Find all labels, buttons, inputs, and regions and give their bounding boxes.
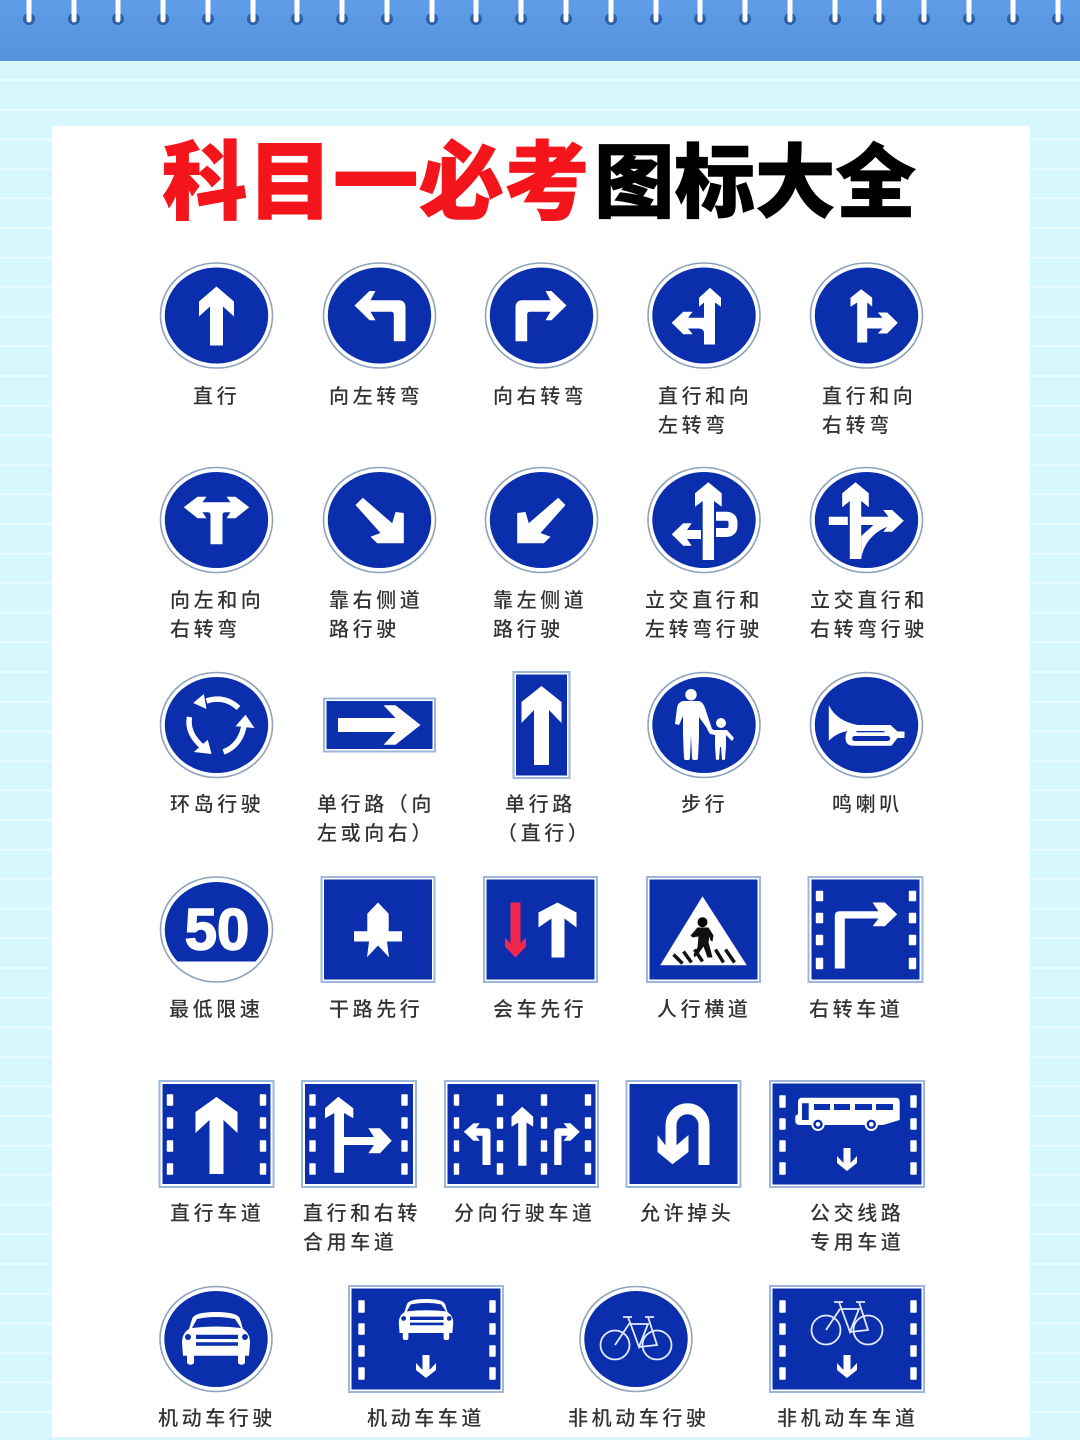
sign: 立交直行和左转弯行驶 (648, 468, 760, 572)
label: 右转车道: 右转车道 (809, 998, 903, 1021)
label: 直行和向左转弯: 直行和向 (658, 385, 752, 408)
sign: 直行和向右转弯 (810, 263, 922, 368)
sign: 干路先行 (322, 877, 434, 982)
sign: 机动车行驶 (160, 1286, 272, 1392)
sign: 单行路（直行） (514, 672, 570, 778)
sign: 公交线路专用车道 (770, 1081, 924, 1187)
label: 直行和右转合用车道: 直行和右转 (303, 1202, 421, 1225)
sign: 单行路（向左或向右） (324, 698, 435, 752)
sign: 向右转弯 (486, 263, 598, 368)
sign: 非机动车行驶 (580, 1286, 692, 1392)
label: 向右转弯: 向右转弯 (493, 385, 587, 408)
label: 公交线路专用车道: 专用车道 (810, 1231, 904, 1254)
label: 靠右侧道路行驶: 靠右侧道 (329, 589, 423, 612)
sign: 会车先行 (484, 877, 597, 982)
label: 干路先行: 干路先行 (329, 998, 423, 1021)
label: 直行: 直行 (193, 385, 240, 408)
label: 立交直行和右转弯行驶: 立交直行和 (810, 589, 928, 612)
sign: 环岛行驶 (160, 672, 272, 778)
label: 立交直行和左转弯行驶: 立交直行和 (645, 589, 763, 612)
sign: 立交直行和右转弯行驶 (810, 468, 922, 572)
label: 靠右侧道路行驶: 路行驶 (329, 618, 400, 641)
label: 公交线路专用车道: 公交线路 (810, 1202, 904, 1225)
sign: 向左转弯 (324, 263, 436, 368)
label: 机动车行驶: 机动车行驶 (158, 1407, 276, 1430)
sign: 分向行驶车道 (445, 1081, 598, 1187)
label: 向左和向右转弯: 右转弯 (170, 618, 241, 641)
title: 科目一必考 (162, 136, 590, 231)
sign: 最低限速 50: 50 (185, 898, 249, 962)
label: 人行横道: 人行横道 (657, 998, 751, 1021)
label: 允许掉头: 允许掉头 (640, 1202, 734, 1225)
sign: 步行 (648, 672, 760, 778)
sign: 允许掉头 (626, 1081, 740, 1187)
label: 立交直行和右转弯行驶: 右转弯行驶 (810, 618, 928, 641)
label: 单行路（直行）: 单行路 (505, 793, 576, 816)
label: 直行车道: 直行车道 (170, 1202, 264, 1225)
title: 图标大全 (594, 139, 916, 229)
sign: 右转车道 (808, 877, 922, 982)
label: 靠左侧道路行驶: 靠左侧道 (493, 589, 587, 612)
label: 向左转弯: 向左转弯 (329, 385, 423, 408)
label: 非机动车行驶: 非机动车行驶 (568, 1407, 710, 1430)
sign: 鸣喇叭 (810, 672, 922, 778)
label: 单行路（直行）: （直行） (497, 822, 591, 845)
notebook header bar with binding rings (0, 0, 1080, 61)
label: 非机动车车道: 非机动车车道 (777, 1407, 919, 1430)
sign: 人行横道 (647, 877, 760, 982)
sign: 靠左侧道路行驶 (486, 468, 598, 572)
sign: 非机动车车道 (770, 1286, 924, 1392)
label: 单行路（向左或向右）: 单行路（向 (317, 793, 435, 816)
sign: 直行和向左转弯 (648, 263, 760, 368)
sign: 机动车车道 (349, 1286, 503, 1392)
sign: 靠右侧道路行驶 (324, 468, 436, 572)
label: 最低限速: 最低限速 (169, 998, 263, 1021)
label: 分向行驶车道: 分向行驶车道 (454, 1202, 596, 1225)
label: 会车先行: 会车先行 (493, 998, 587, 1021)
label: 直行和向左转弯: 左转弯 (658, 414, 729, 437)
sign: 向左和向右转弯 (160, 468, 272, 572)
sign: 最低限速 50 (160, 877, 272, 982)
sign: 直行车道 (160, 1081, 274, 1187)
label: 向左和向右转弯: 向左和向 (170, 589, 264, 612)
label: 鸣喇叭: 鸣喇叭 (832, 793, 903, 816)
label: 步行: 步行 (681, 793, 728, 816)
label: 直行和向右转弯: 直行和向 (822, 385, 916, 408)
label: 立交直行和左转弯行驶: 左转弯行驶 (645, 618, 763, 641)
label: 单行路（向左或向右）: 左或向右） (317, 822, 435, 845)
label: 直行和向右转弯: 右转弯 (822, 414, 893, 437)
sign: 直行和右转合用车道 (302, 1081, 416, 1187)
label: 直行和右转合用车道: 合用车道 (303, 1231, 397, 1254)
label: 机动车车道: 机动车车道 (367, 1407, 485, 1430)
sign: 直行 (160, 263, 272, 368)
label: 靠左侧道路行驶: 路行驶 (493, 618, 564, 641)
label: 环岛行驶: 环岛行驶 (170, 793, 264, 816)
